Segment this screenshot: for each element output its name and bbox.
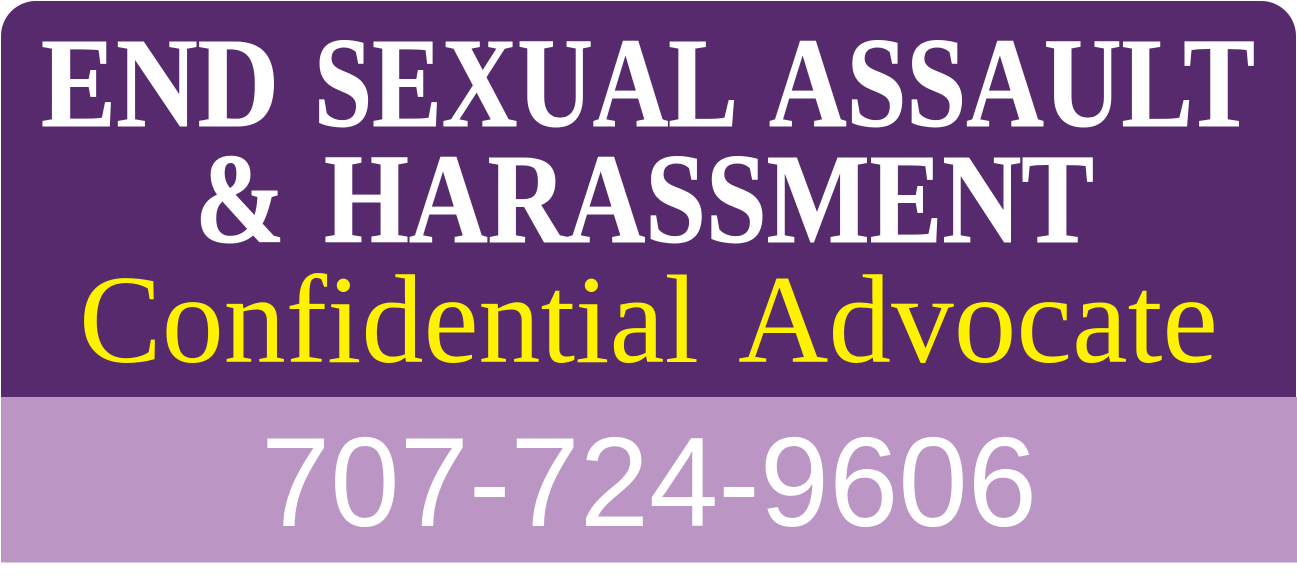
phone number: 707-724-9606 bbox=[261, 411, 1037, 553]
heading: end sexual assault bbox=[41, 12, 1255, 154]
heading: end sexual assault: SEXUAL bbox=[314, 12, 738, 154]
heading: end sexual assault: END bbox=[41, 12, 279, 154]
subheading: confidential advocate: Confidential bbox=[79, 251, 699, 390]
heading: and harassment: HARASSMENT bbox=[324, 128, 1094, 270]
subheading: confidential advocate bbox=[79, 251, 1218, 390]
subheading: confidential advocate: Advocate bbox=[738, 251, 1218, 390]
panel: purple header background bbox=[1, 1, 1296, 397]
panel: lilac phone band bbox=[1, 397, 1297, 562]
heading: and harassment: & bbox=[195, 128, 285, 270]
